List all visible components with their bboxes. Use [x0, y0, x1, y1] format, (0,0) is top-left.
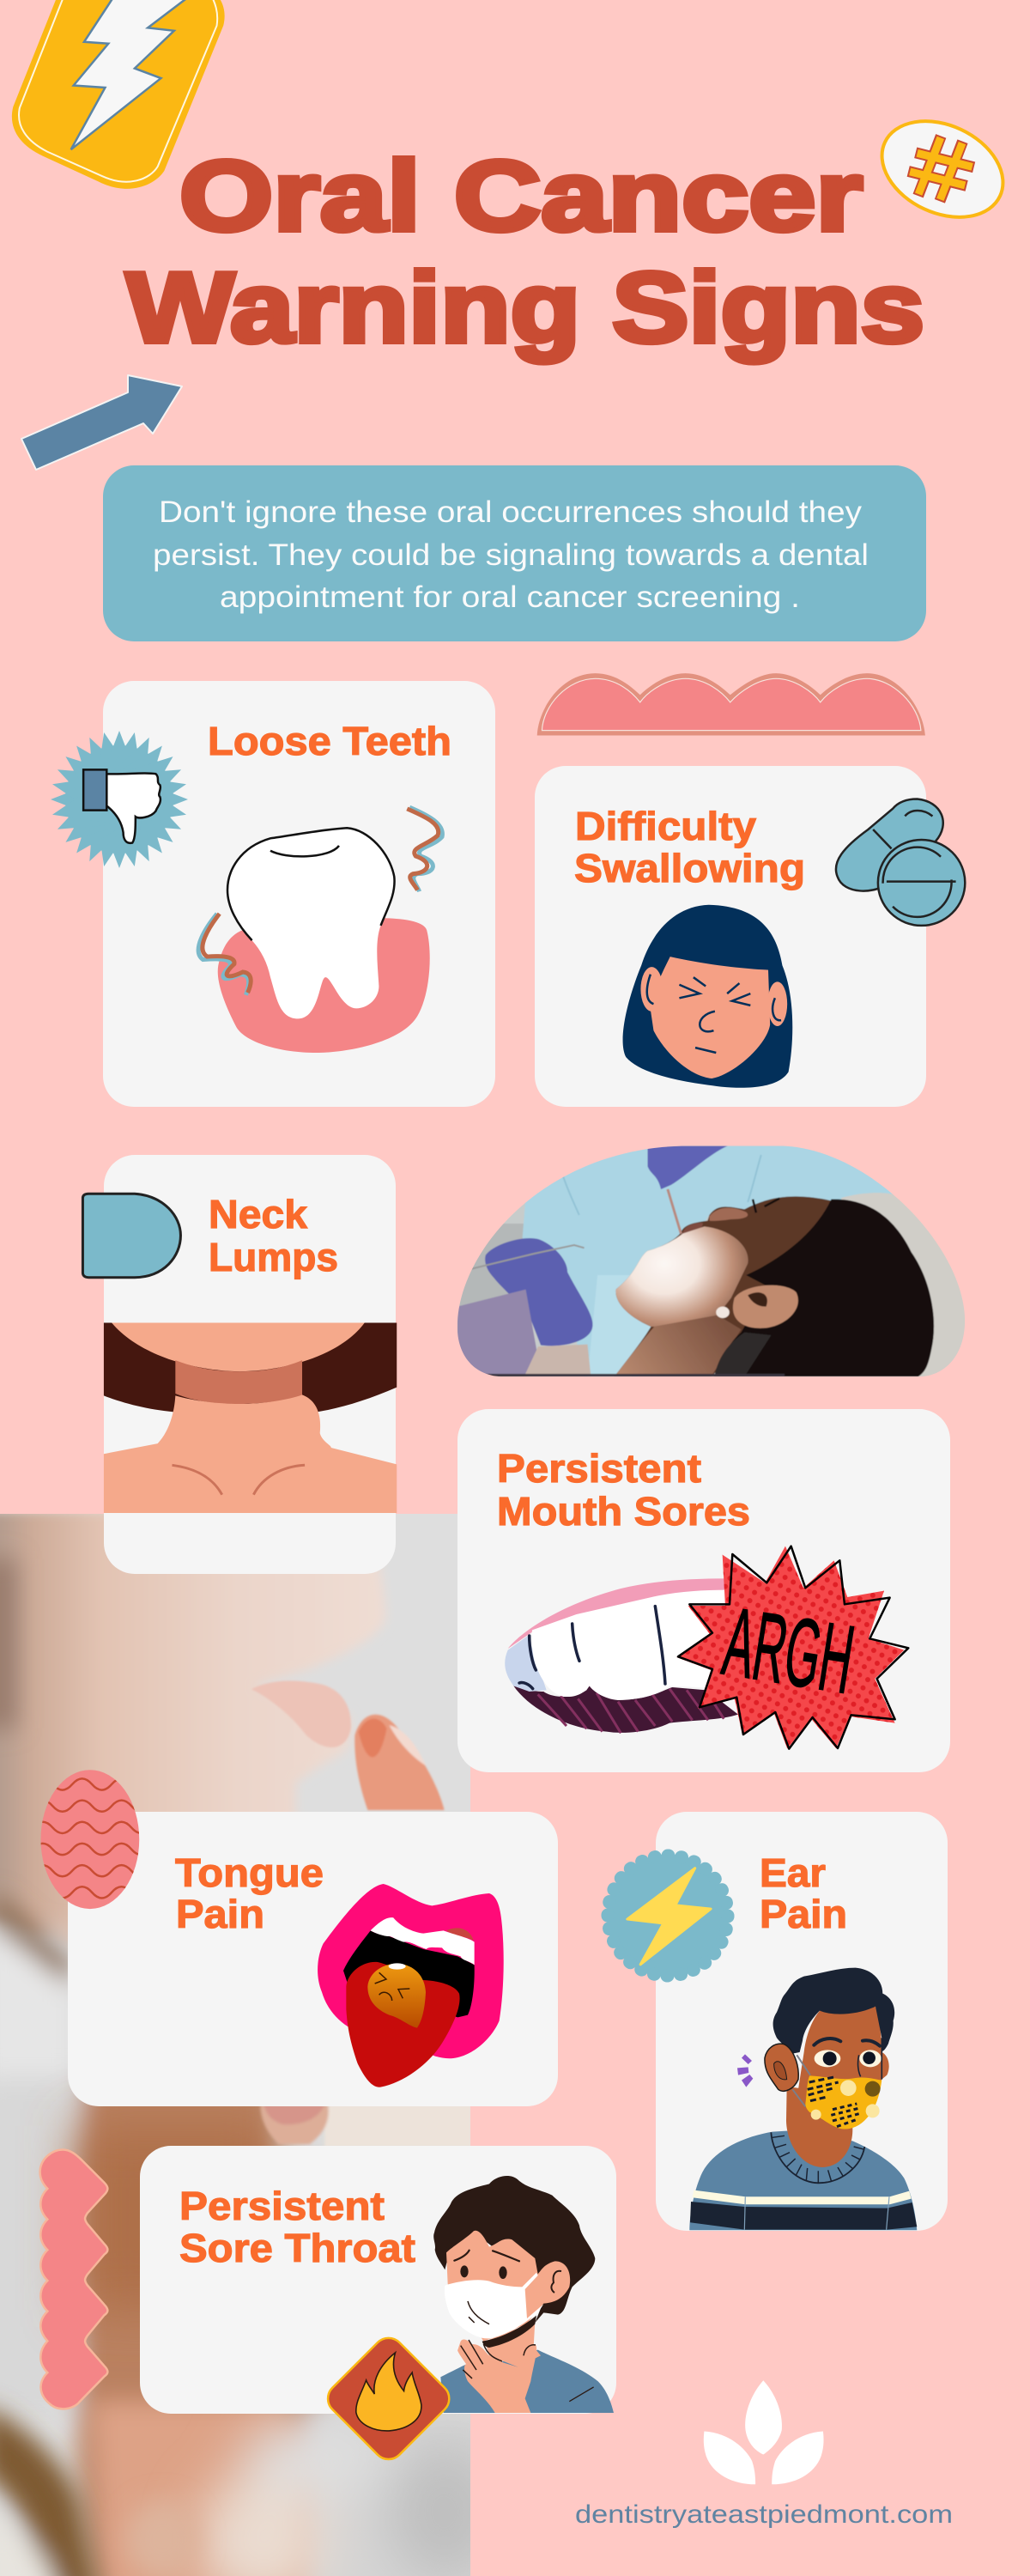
icon: mouth with argh burst	[505, 1546, 908, 1749]
heading: difficulty swallowing	[574, 804, 805, 890]
heading: difficulty swallowing: Difficulty	[575, 804, 756, 848]
tray	[457, 1290, 538, 1376]
decorative badge: lightning bolt tag	[12, 0, 225, 189]
panel: persistent mouth sores	[457, 1409, 950, 1772]
icon: mouth with argh burst: ARGH	[717, 1587, 861, 1714]
heading: difficulty swallowing: Swallowing	[574, 846, 805, 890]
decorative wavy ribbon	[40, 2150, 107, 2409]
heading: persistent mouth sores: Mouth Sores	[497, 1489, 750, 1534]
icon: neck illustration	[104, 1323, 397, 1513]
heading: neck lumps	[209, 1192, 338, 1279]
heading: neck lumps: Neck	[209, 1192, 307, 1236]
icon: pills	[836, 799, 965, 926]
logo: white petals	[704, 2380, 824, 2484]
intro text box: appointment for oral cancer screening .	[220, 580, 800, 614]
title: Warning Signs	[126, 252, 924, 363]
panel: ear pain	[608, 1812, 948, 2231]
instruments	[668, 1189, 681, 1234]
background photo: lips and finger	[0, 1511, 500, 2576]
patient face and neck	[615, 1196, 831, 1376]
decorative oval with wave pattern	[41, 1770, 139, 1910]
panel: neck lumps	[82, 1155, 397, 1574]
panel: tongue pain	[68, 1812, 558, 2106]
heading: tongue pain: Tongue	[175, 1850, 324, 1895]
decorative badge: hashtag	[866, 103, 1019, 235]
heading: persistent sore throat: Sore Throat	[179, 2226, 415, 2270]
intro text box	[103, 465, 926, 641]
title	[126, 140, 924, 363]
heading: persistent sore throat	[179, 2184, 415, 2270]
icon: teal bolt seal	[608, 1856, 728, 1976]
heading: loose teeth: Loose Teeth	[208, 719, 451, 763]
icon: woman wincing	[623, 905, 792, 1088]
panel: persistent sore throat	[140, 2146, 616, 2465]
heading: tongue pain	[175, 1850, 324, 1936]
icon: man in yellow mask	[689, 1968, 917, 2230]
heading: persistent sore throat: Persistent	[179, 2184, 385, 2228]
hair	[714, 1200, 934, 1376]
intro text box: persist. They could be signaling towards a dental	[153, 538, 869, 572]
heading: ear pain: Pain	[760, 1892, 847, 1936]
panel: loose teeth	[45, 681, 495, 1107]
photo: dentist examining patient	[457, 1145, 965, 1377]
intro text box: Don't ignore these oral occurrences should they	[159, 495, 863, 529]
icon: loose tooth and gum	[198, 807, 442, 1053]
gloves	[648, 1145, 728, 1189]
icon: man holding throat	[433, 2176, 614, 2413]
icon: flame diamond	[322, 2331, 456, 2465]
lips	[251, 1680, 351, 1747]
decorative scallop banner	[537, 673, 925, 735]
heading: tongue pain: Pain	[176, 1892, 264, 1936]
heading: neck lumps: Lumps	[209, 1235, 338, 1279]
heading: persistent mouth sores	[497, 1446, 750, 1534]
footer website: dentistryateastpiedmont.com	[575, 2500, 953, 2529]
shape: teal tab	[82, 1194, 180, 1278]
title: Oral Cancer	[179, 140, 863, 252]
ear	[733, 1285, 798, 1328]
icon: mouth and tongue	[318, 1884, 504, 2087]
heading: persistent mouth sores: Persistent	[497, 1446, 701, 1491]
heading: ear pain	[760, 1850, 847, 1936]
icon: lightning bolt	[71, 0, 187, 149]
panel: difficulty swallowing	[535, 766, 965, 1107]
heading: ear pain: Ear	[760, 1850, 826, 1895]
icon: thumbs down starburst	[45, 726, 193, 873]
icon: diagonal arrow	[21, 375, 182, 470]
